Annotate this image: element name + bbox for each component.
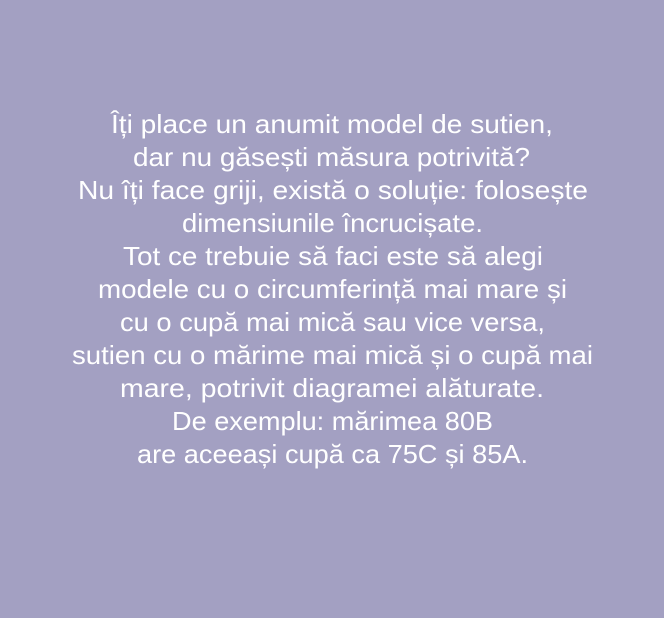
- text block: bra size explanation: Tot ce trebuie să faci este să alegi: [123, 241, 543, 271]
- text block: bra size explanation: dimensiunile încrucișate.: [182, 208, 483, 238]
- text block: bra size explanation: dar nu găsești măsura potrivită?: [133, 142, 530, 172]
- text block: bra size explanation: [72, 109, 593, 469]
- text block: bra size explanation: Nu îți face griji, există o soluție: folosește: [78, 175, 588, 205]
- text block: bra size explanation: cu o cupă mai mică sau vice versa,: [120, 307, 545, 337]
- text block: bra size explanation: mare, potrivit diagramei alăturate.: [120, 373, 544, 403]
- text block: bra size explanation: are aceeași cupă ca 75C și 85A.: [137, 439, 528, 469]
- text block: bra size explanation: Îți place un anumit model de sutien,: [110, 109, 553, 139]
- text block: bra size explanation: sutien cu o mărime mai mică și o cupă mai: [72, 340, 593, 370]
- text block: bra size explanation: De exemplu: mărimea 80B: [172, 406, 493, 436]
- text block: bra size explanation: modele cu o circumferință mai mare și: [98, 274, 567, 304]
